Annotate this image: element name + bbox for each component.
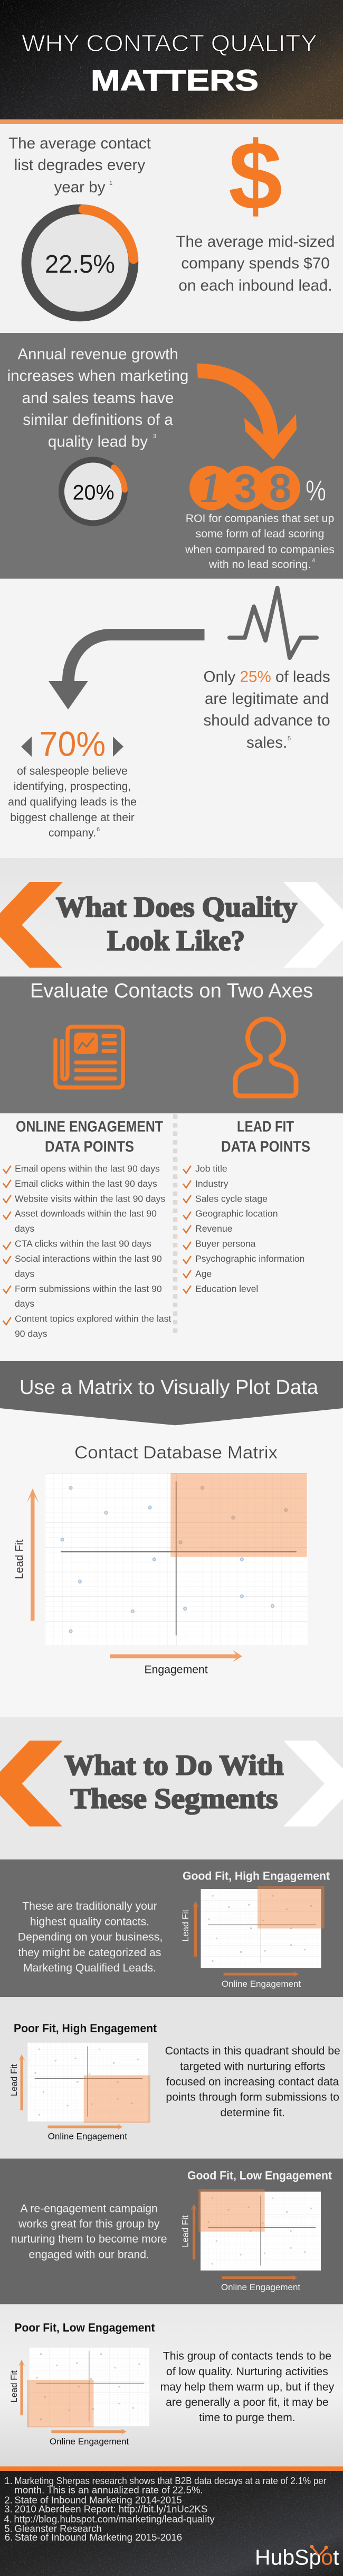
banner: use a matrix: Use a Matrix to Visually Plot Data	[20, 1376, 319, 1399]
revenue growth text: similar definitions of a	[23, 411, 173, 429]
segment text: nurturing them to become more	[11, 2233, 167, 2245]
revenue growth text: and sales teams have	[22, 389, 174, 407]
ROI text	[185, 513, 335, 571]
ROI text: with no lead scoring.	[208, 559, 311, 571]
arrow: curved orange	[197, 364, 297, 460]
segment text	[165, 2045, 340, 2119]
salespeople text: biggest challenge at their	[10, 812, 135, 824]
heading text	[64, 1749, 284, 1815]
list: online engagement: Social interactions within the last 90	[15, 1253, 162, 1264]
list: lead fit: Geographic location	[195, 1208, 278, 1219]
label: online engagement: Online Engagement	[48, 2132, 127, 2141]
heading text: Look Like?	[107, 925, 245, 956]
segment text: Contacts in this quadrant should be	[165, 2045, 340, 2057]
segment text: time to purge them.	[199, 2412, 296, 2424]
panel: good fit, low engagement	[0, 2159, 343, 2304]
segment text: determine fit.	[220, 2107, 285, 2119]
icon: newspaper	[55, 1027, 123, 1087]
chevron: white	[283, 1741, 343, 1826]
revenue growth text: Annual revenue growth	[17, 346, 178, 363]
list: lead fit: Revenue	[195, 1223, 232, 1234]
icon: person	[235, 1019, 296, 1096]
panel: contact database matrix	[0, 1361, 343, 1717]
stat: 138%: %	[306, 474, 326, 507]
ROI text: 4	[312, 557, 315, 564]
degrade text: year by	[54, 179, 106, 196]
panel: legitimate leads and challenge	[0, 579, 343, 858]
arrow: lead fit	[18, 2360, 25, 2415]
list: online engagement: Website visits within the last 90 days	[15, 1193, 165, 1204]
segment text	[11, 2202, 167, 2261]
panel: header	[0, 0, 343, 124]
inbound lead cost text: company spends $70	[181, 255, 330, 272]
revenue growth text: quality lead by	[48, 433, 148, 450]
list: online engagement: days	[15, 1269, 34, 1279]
sources list	[4, 2475, 326, 2543]
25% text: should advance to	[203, 712, 330, 729]
list: online engagement: CTA clicks within the last 90 days	[15, 1239, 151, 1249]
donut chart 22.5%	[26, 209, 134, 317]
segment text: focused on increasing contact data	[166, 2076, 339, 2088]
chevron: orange	[0, 1741, 63, 1826]
segment title: Poor Fit, Low Engagement	[14, 2321, 155, 2335]
sources list: month. This is an annualized rate of 22.5%.	[14, 2485, 203, 2496]
ROI text: ROI for companies that set up	[186, 513, 334, 525]
segment text: engaged with our brand.	[28, 2248, 149, 2261]
25% text: 5	[288, 736, 291, 742]
label: engagement: Engagement	[145, 1664, 208, 1676]
icon: dollar sign: $	[228, 121, 282, 230]
inbound lead cost text	[176, 233, 335, 294]
list: online engagement: Form submissions within the last 90	[15, 1284, 162, 1294]
sources list: 2.	[4, 2494, 13, 2506]
segment text: they might be categorized as	[18, 1947, 161, 1959]
banner: use a matrix	[0, 1361, 343, 1425]
sources list: 2010 Aberdeen Report: http://bit.ly/1nUc2KS	[14, 2504, 207, 2515]
revenue growth text	[7, 346, 188, 450]
25% text: sales.	[246, 734, 287, 751]
sources list: 3.	[4, 2504, 13, 2515]
label: lead fit: Lead Fit	[9, 2370, 19, 2403]
mini matrix	[198, 2189, 321, 2271]
list: online engagement: Asset downloads within the last 90	[15, 1208, 157, 1219]
arrow: lead fit	[192, 1901, 199, 1957]
list: online engagement: Email opens within the last 90 days	[15, 1164, 160, 1174]
arrow: engagement	[222, 2274, 297, 2281]
panel: revenue growth and ROI	[0, 333, 343, 579]
label: online engagement: Online Engagement	[50, 2436, 129, 2447]
25% text	[203, 668, 330, 751]
sources list: http://blog.hubspot.com/marketing/lead-quality	[14, 2513, 215, 2524]
mini matrix	[27, 2043, 150, 2123]
panel: evaluate contacts on two axes	[0, 977, 343, 1113]
heading text	[56, 891, 297, 956]
list: lead fit: Age	[195, 1269, 212, 1279]
chevron: white	[283, 882, 343, 968]
segment text: targeted with nurturing efforts	[180, 2060, 325, 2072]
salespeople text: and qualifying leads is the	[8, 796, 137, 808]
donut chart 20%	[61, 460, 125, 523]
revenue growth text: 3	[153, 433, 156, 440]
segment title: Good Fit, Low Engagement	[187, 2169, 332, 2182]
segment text: A re-engagement campaign	[21, 2202, 158, 2215]
title line 1: WHY CONTACT QUALITY	[22, 31, 317, 57]
arrow: lead fit	[18, 2054, 25, 2110]
salespeople text: company.	[49, 827, 96, 839]
list: lead fit: Psychographic information	[195, 1253, 304, 1264]
segment text: This group of contacts tends to be	[163, 2350, 331, 2363]
inbound lead cost text: 2	[323, 278, 327, 284]
panel: contact list degradation	[0, 121, 343, 333]
arrow: engagement	[224, 1971, 299, 1977]
segment text: points through form submissions to	[166, 2091, 339, 2104]
ROI text: some form of lead scoring	[196, 528, 324, 540]
list: lead fit	[183, 1118, 310, 1294]
inbound lead cost text: on each inbound lead.	[178, 277, 332, 294]
mini matrix	[201, 1886, 325, 1968]
heading banner: what to do with these segments	[0, 1717, 343, 1859]
icon: pulse line	[230, 588, 317, 658]
segment title: Good Fit, High Engagement	[183, 1869, 330, 1882]
ROI text: when compared to companies	[185, 544, 335, 556]
list: lead fit: Sales cycle stage	[195, 1193, 268, 1204]
matrix title: Contact Database Matrix	[74, 1443, 278, 1462]
salespeople text: identifying, prospecting,	[14, 780, 131, 793]
label: lead fit: Lead Fit	[9, 2064, 19, 2096]
degrade text: 1	[109, 180, 112, 187]
segment text: works great for this group by	[18, 2218, 160, 2230]
revenue growth text: increases when marketing	[7, 367, 188, 385]
sources list: State of Inbound Marketing 2015-2016	[15, 2532, 182, 2543]
sources list: Gleanster Research	[14, 2523, 102, 2534]
stat: 138%: 1	[200, 465, 221, 512]
label: online engagement: Online Engagement	[221, 2282, 300, 2292]
salespeople text	[8, 765, 137, 839]
segment text: Marketing Qualified Leads.	[23, 1962, 156, 1974]
heading banner: what does quality look like	[0, 858, 343, 977]
salespeople text: 6	[97, 826, 100, 833]
panel: footer	[0, 2467, 343, 2576]
list: online engagement: Email clicks within the last 90 days	[15, 1178, 157, 1189]
stat: 70%: 70%	[40, 724, 106, 764]
list: lead fit: Education level	[195, 1284, 258, 1294]
arrow: engagement axis	[110, 1650, 242, 1662]
label: lead fit: Lead Fit	[180, 2215, 190, 2247]
sources list: 4.	[4, 2513, 12, 2524]
segment text: are generally a poor fit, it may be	[166, 2396, 329, 2408]
inbound lead cost text: The average mid-sized	[176, 233, 335, 250]
section heading: Evaluate Contacts on Two Axes	[30, 980, 313, 1002]
list: online engagement: DATA POINTS	[45, 1138, 134, 1155]
title line 2: MATTERS	[91, 63, 259, 97]
donut chart 22.5%: 22.5%	[45, 250, 115, 278]
heading text: These Segments	[71, 1783, 278, 1815]
list: lead fit: Job title	[195, 1164, 227, 1174]
stat: 70%	[21, 724, 123, 764]
list: online engagement: ONLINE ENGAGEMENT	[16, 1118, 163, 1135]
panel: poor fit, high engagement	[0, 1997, 343, 2159]
list: online engagement: 90 days	[15, 1328, 47, 1339]
list: lead fit: Industry	[195, 1178, 228, 1189]
segment text: may help them warm up, but if they	[160, 2381, 335, 2393]
chevron: orange	[0, 882, 63, 968]
degrade text	[8, 135, 151, 196]
logo: HubSpot: HubSpot	[255, 2545, 339, 2569]
label: lead fit: Lead Fit	[14, 1539, 25, 1579]
list: lead fit: DATA POINTS	[221, 1138, 310, 1155]
mini matrix	[27, 2347, 149, 2428]
list: lead fit: LEAD FIT	[237, 1118, 294, 1135]
list: online engagement: days	[15, 1223, 34, 1234]
stat: 138%: 3	[234, 466, 256, 511]
sources list: 6.	[5, 2532, 13, 2543]
label: lead fit: Lead Fit	[180, 1909, 190, 1941]
stat: 138%: 8	[269, 466, 291, 511]
arrow: curved grey	[49, 629, 205, 710]
heading text: What to Do With	[64, 1749, 284, 1781]
segment text: highest quality contacts.	[30, 1915, 149, 1928]
salespeople text: of salespeople believe	[17, 765, 128, 777]
heading text: What Does Quality	[56, 891, 297, 923]
25% text: are legitimate and	[205, 690, 329, 708]
degrade text: The average contact	[8, 135, 151, 152]
list: online engagement: Content topics explored within the last	[15, 1314, 171, 1324]
list: lead fit: Buyer persona	[195, 1239, 256, 1249]
25% text: Only 25% of leads	[204, 668, 330, 686]
segment text: Depending on your business,	[18, 1931, 163, 1943]
list: online engagement	[3, 1118, 171, 1339]
sources list: 1.	[4, 2475, 13, 2486]
arrow: lead fit	[190, 2204, 197, 2259]
panel: good fit, high engagement	[0, 1859, 343, 1997]
donut chart 20%: 20%	[73, 481, 115, 505]
segment title: Poor Fit, High Engagement	[14, 2022, 157, 2035]
arrow: engagement	[47, 2124, 122, 2130]
list: online engagement: days	[15, 1298, 34, 1309]
arrow: engagement	[51, 2429, 127, 2435]
sources list: 5.	[4, 2523, 13, 2534]
panel: data points lists	[0, 1113, 343, 1361]
sources list: State of Inbound Marketing 2014-2015	[14, 2494, 182, 2506]
panel: poor fit, low engagement	[0, 2304, 343, 2467]
matrix chart	[45, 1473, 308, 1646]
stat: 138%	[189, 465, 326, 512]
label: online engagement: Online Engagement	[222, 1979, 301, 1989]
segment text	[160, 2350, 335, 2424]
segment text: These are traditionally your	[22, 1900, 157, 1912]
arrow: lead fit axis	[27, 1489, 39, 1621]
segment text: of low quality. Nurturing activities	[166, 2366, 328, 2378]
degrade text: list degrades every	[14, 156, 145, 174]
segment text	[18, 1900, 163, 1974]
